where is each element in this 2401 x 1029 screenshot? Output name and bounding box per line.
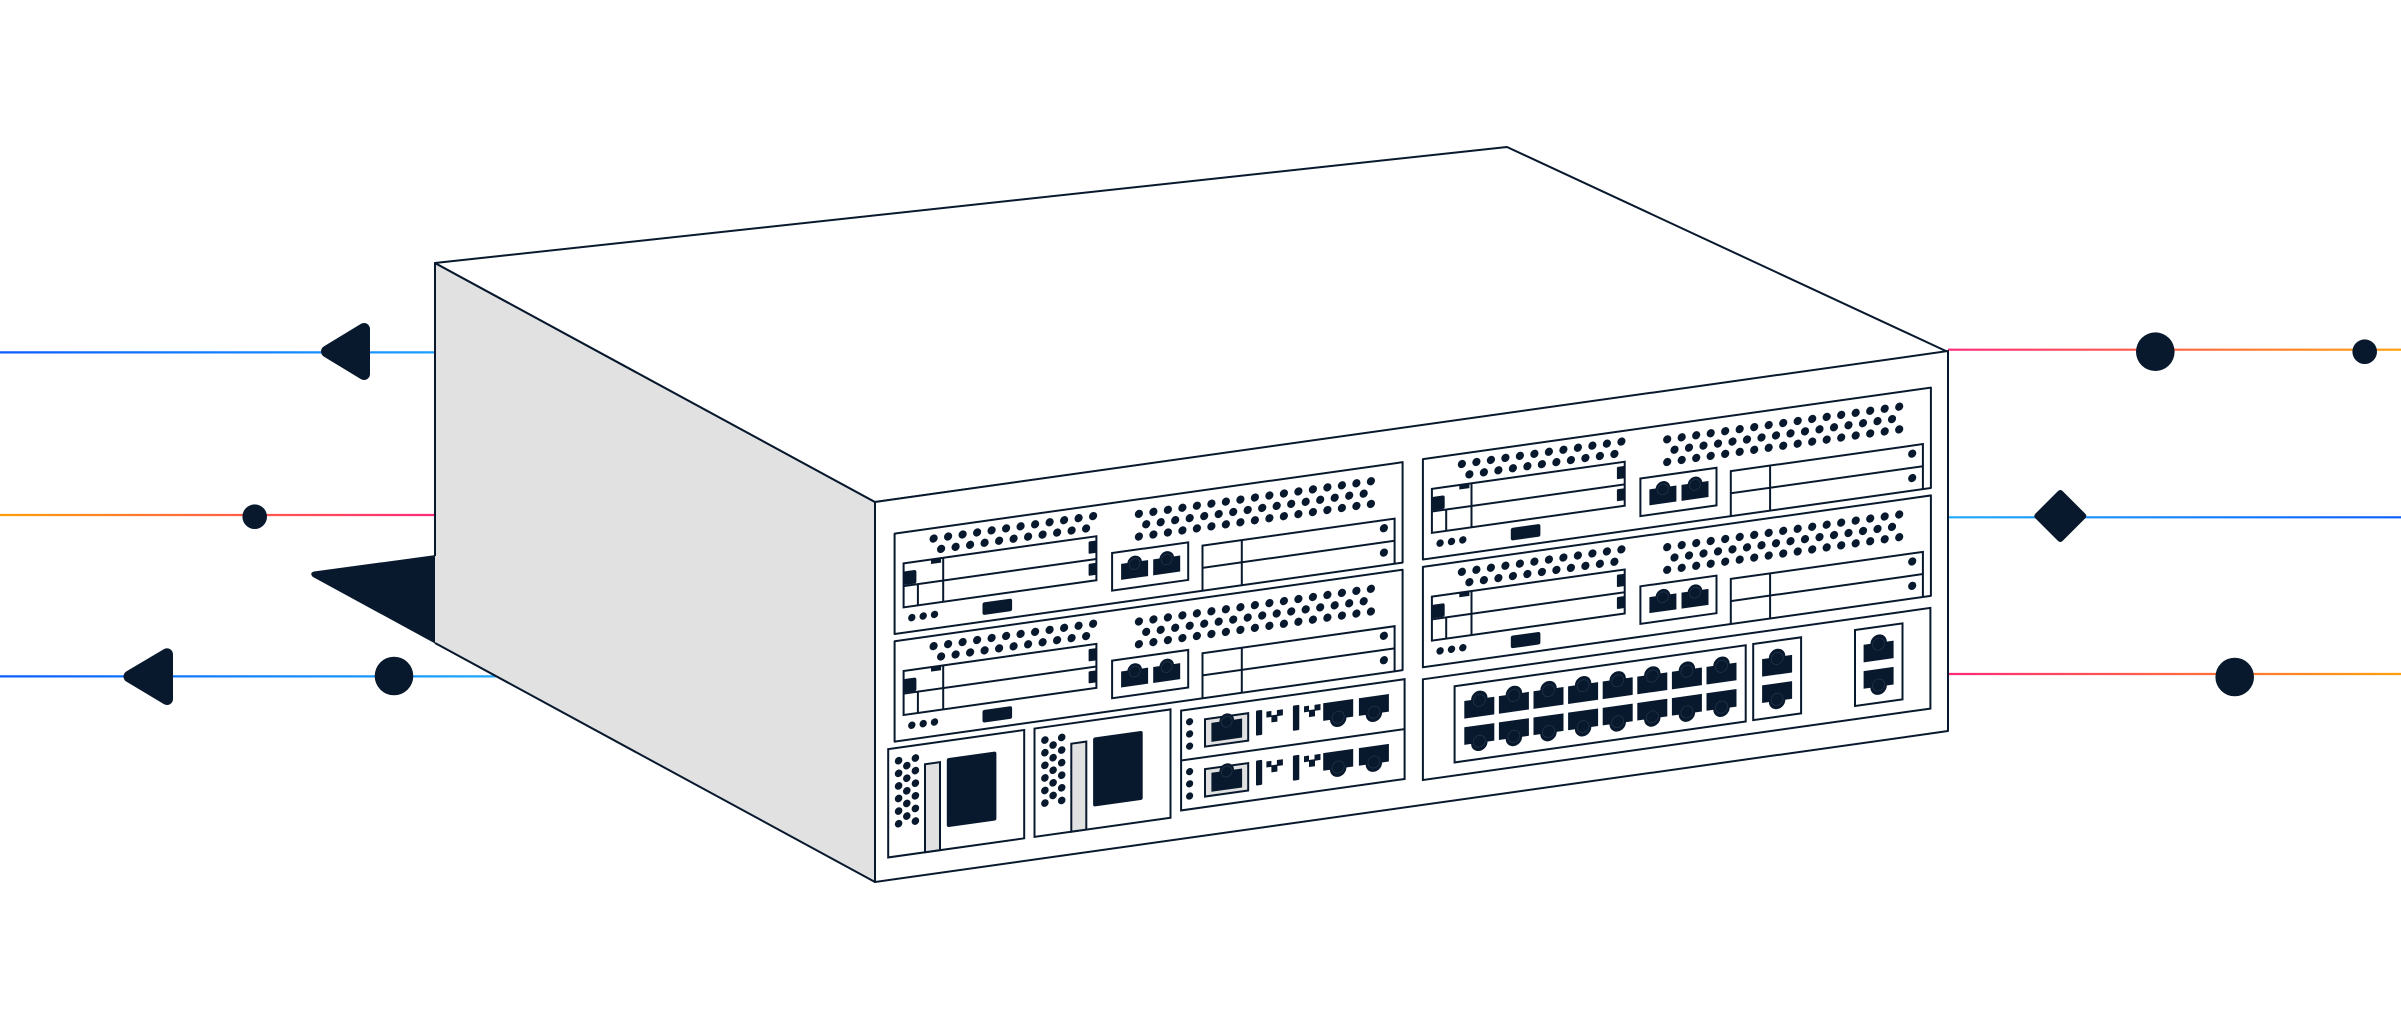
icon: circle node right bottom <box>2215 658 2254 696</box>
power module: second <box>1034 709 1170 837</box>
chassis <box>435 147 1948 882</box>
line card: upper left <box>895 462 1403 634</box>
IO row: top <box>1186 690 1389 750</box>
port block: 2 ports right <box>1855 623 1902 706</box>
icon: triangle node left top <box>327 329 364 374</box>
line card: upper right <box>1423 388 1931 560</box>
line: right bottom pink to orange <box>1948 673 2401 675</box>
chassis side edges <box>435 263 875 882</box>
chassis front face <box>875 351 1948 882</box>
line: left middle orange to pink <box>0 514 434 516</box>
line: left bottom blue <box>0 675 500 678</box>
connector lines: right side <box>1948 350 2401 674</box>
line: right top pink to orange <box>1948 349 2401 351</box>
line: right middle blue <box>1948 516 2401 518</box>
port block: 2 ports middle <box>1753 637 1801 720</box>
IO row: bottom <box>1186 740 1389 800</box>
icon: circle node right top large <box>2136 332 2175 371</box>
icon: circle node left bottom <box>375 657 413 695</box>
connector lines: left side <box>0 352 500 676</box>
shadow wedge <box>311 555 436 644</box>
line: left top blue <box>0 351 434 353</box>
line card: lower left <box>895 570 1403 742</box>
icon: circle node left middle <box>242 504 267 529</box>
switch module <box>1423 608 1930 780</box>
icon: circle node right top small <box>2352 339 2377 364</box>
power module: first <box>888 730 1024 857</box>
line card: lower right <box>1423 495 1931 667</box>
IO module: two rows <box>1181 679 1405 810</box>
chassis top face <box>435 147 1948 502</box>
chassis side face <box>435 263 875 882</box>
icon: triangle node left bottom <box>130 654 167 699</box>
port block: 16 ports <box>1455 645 1746 762</box>
icon: diamond node right middle <box>2037 493 2083 539</box>
